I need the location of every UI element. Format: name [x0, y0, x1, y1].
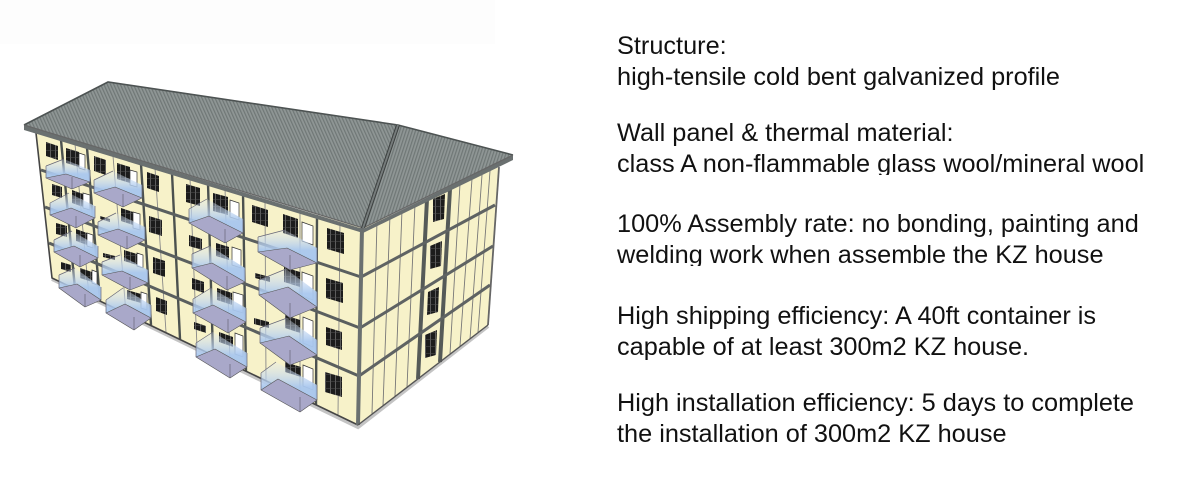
plinth [52, 279, 488, 427]
text: structure [617, 32, 1060, 90]
text: installation efficiency [617, 389, 1134, 448]
front wall [36, 133, 362, 425]
text: shipping efficiency: High shipping efficiency: A 40ft container is [617, 302, 1096, 330]
text: installation efficiency: the installation of 300m2 KZ house [617, 420, 1007, 448]
right wall [358, 167, 499, 425]
text: wall panel and thermal material: Wall panel & thermal material: [617, 119, 953, 147]
text: shipping efficiency: capable of at least 300m2 KZ house. [617, 332, 1029, 360]
text: structure: high-tensile cold bent galvanized profile [617, 62, 1060, 90]
text: installation efficiency: High installation efficiency: 5 days to complete [617, 389, 1134, 417]
windows [46, 142, 344, 397]
text: assembly rate: 100% Assembly rate: no bonding, painting and [617, 210, 1139, 238]
text: wall panel and thermal material [617, 119, 1144, 175]
roof [24, 82, 513, 233]
text: structure: Structure: [617, 32, 727, 60]
doors [79, 153, 313, 390]
text: assembly rate [617, 210, 1139, 266]
balconies [46, 159, 317, 412]
text: shipping efficiency [617, 302, 1096, 360]
building illustration [24, 81, 514, 430]
